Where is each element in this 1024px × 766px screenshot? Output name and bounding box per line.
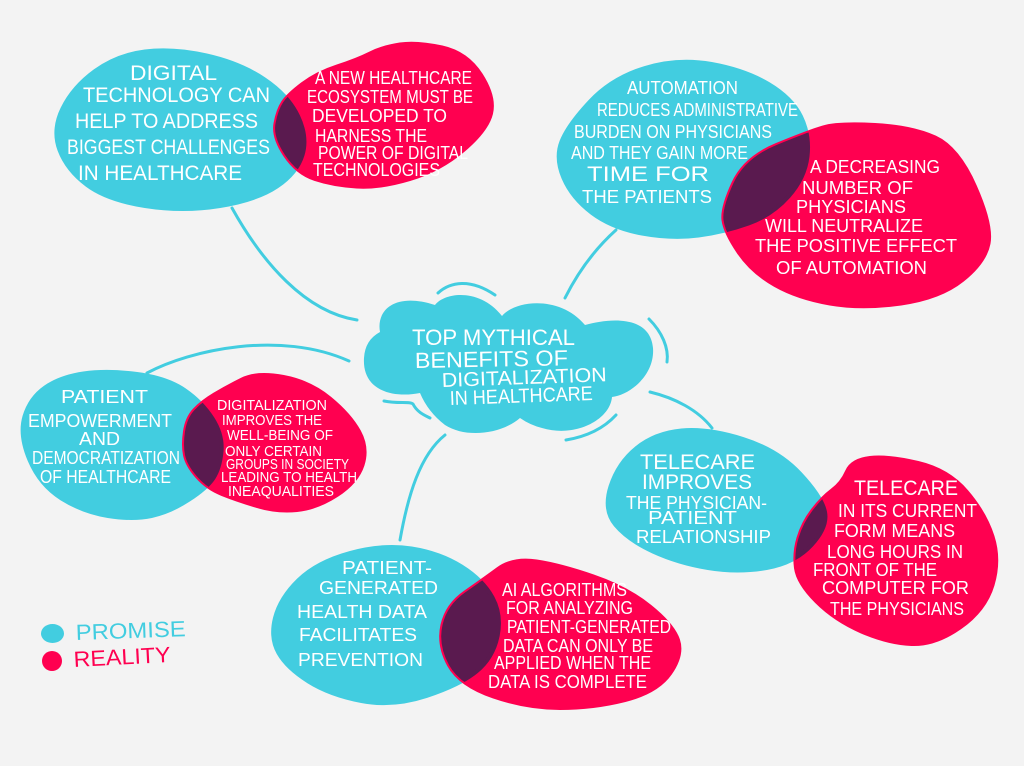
legend label: reality: REALITY bbox=[73, 642, 171, 672]
reality text: HARNESS THE bbox=[315, 126, 427, 146]
panel: central cloud title bbox=[364, 283, 667, 440]
reality text: AI ALGORITHMS bbox=[502, 580, 627, 600]
promise bubble bbox=[273, 547, 499, 703]
reality text: IN ITS CURRENT bbox=[838, 501, 977, 521]
panel: digital technology bbox=[56, 44, 492, 209]
promise text bbox=[571, 78, 798, 207]
reality text: INEAQUALITIES bbox=[228, 484, 334, 500]
legend swatch: promise bbox=[41, 624, 64, 643]
reality text: DATA CAN ONLY BE bbox=[503, 636, 653, 656]
promise text: IN HEALTHCARE bbox=[78, 162, 242, 185]
promise text: PREVENTION bbox=[298, 650, 423, 670]
overlap bbox=[795, 499, 828, 560]
connector: patient empowerment to center bbox=[147, 345, 349, 373]
promise text: PATIENT bbox=[648, 508, 737, 528]
promise text bbox=[67, 62, 270, 185]
reality bubble bbox=[275, 44, 492, 187]
reality text: PATIENT-GENERATED bbox=[507, 617, 671, 637]
reality text: ONLY CERTAIN bbox=[225, 444, 322, 460]
promise text: AND THEY GAIN MORE bbox=[571, 143, 748, 163]
title text: TOP MYTHICAL bbox=[412, 325, 575, 350]
reality text: DEVELOPED TO bbox=[312, 106, 447, 126]
promise text: RELATIONSHIP bbox=[636, 527, 771, 547]
title text: IN HEALTHCARE bbox=[449, 383, 593, 410]
reality text bbox=[307, 68, 473, 180]
reality text: A NEW HEALTHCARE bbox=[315, 68, 472, 88]
promise text: OF HEALTHCARE bbox=[40, 467, 171, 487]
promise text: BURDEN ON PHYSICIANS bbox=[574, 122, 772, 142]
promise bubble bbox=[559, 62, 808, 237]
overlap bbox=[275, 96, 306, 170]
connector: telecare to center bbox=[650, 392, 712, 428]
promise text: THE PATIENTS bbox=[582, 187, 712, 207]
promise text: REDUCES ADMINISTRATIVE bbox=[597, 100, 798, 120]
reality text: DIGITALIZATION bbox=[217, 398, 327, 414]
reality bubble bbox=[441, 561, 679, 708]
promise text bbox=[28, 387, 180, 487]
overlap bbox=[723, 132, 810, 232]
reality text: THE POSITIVE EFFECT bbox=[755, 236, 957, 256]
promise bubble bbox=[56, 50, 304, 209]
promise text: FACILITATES bbox=[299, 625, 417, 645]
promise text: PATIENT- bbox=[342, 558, 432, 578]
promise text: BIGGEST CHALLENGES bbox=[67, 136, 270, 159]
panel: patient empowerment bbox=[23, 372, 365, 518]
cloud accent strokes bbox=[384, 283, 667, 440]
reality text: LONG HOURS IN bbox=[827, 542, 963, 562]
reality bubble bbox=[184, 375, 365, 510]
promise text: PATIENT bbox=[61, 387, 148, 407]
promise text: IMPROVES bbox=[642, 471, 752, 494]
panel: patient-generated data bbox=[273, 547, 679, 708]
promise text: AND bbox=[79, 429, 120, 449]
promise text bbox=[626, 451, 771, 547]
connector: automation to center bbox=[565, 230, 616, 298]
promise text: DEMOCRATIZATION bbox=[32, 448, 180, 468]
reality text: PHYSICIANS bbox=[796, 197, 906, 217]
reality text: WELL-BEING OF bbox=[227, 428, 333, 444]
reality text: FOR ANALYZING bbox=[506, 598, 633, 618]
reality text: TECHNOLOGIES bbox=[313, 160, 440, 180]
promise text: EMPOWERMENT bbox=[28, 411, 172, 431]
reality text bbox=[755, 157, 957, 278]
overlap bbox=[184, 402, 224, 487]
promise text: GENERATED bbox=[319, 578, 438, 598]
reality text: GROUPS IN SOCIETY bbox=[226, 457, 349, 473]
reality bubble bbox=[723, 124, 989, 306]
legend swatch: reality bbox=[42, 651, 62, 671]
promise text bbox=[297, 558, 438, 670]
title text bbox=[412, 325, 607, 410]
cloud shape bbox=[364, 295, 653, 433]
reality text: TELECARE bbox=[854, 477, 958, 500]
reality text: A DECREASING bbox=[810, 157, 940, 177]
reality text: LEADING TO HEALTH bbox=[221, 470, 357, 486]
promise text: TIME FOR bbox=[587, 163, 709, 186]
connector: digital technology to center bbox=[232, 208, 357, 320]
reality text: FRONT OF THE bbox=[813, 560, 937, 580]
promise text: HEALTH DATA bbox=[297, 602, 427, 622]
reality text bbox=[488, 580, 671, 692]
panel: automation bbox=[559, 62, 989, 306]
reality text: ECOSYSTEM MUST BE bbox=[307, 87, 473, 107]
legend label: promise: PROMISE bbox=[75, 616, 186, 645]
reality text: APPLIED WHEN THE bbox=[494, 653, 651, 673]
reality bubble bbox=[795, 458, 996, 644]
connector: patient data to center bbox=[400, 435, 445, 540]
reality text: NUMBER OF bbox=[802, 178, 913, 198]
overlap bbox=[441, 580, 501, 682]
reality text: OF AUTOMATION bbox=[776, 258, 927, 278]
reality text: POWER OF DIGITAL bbox=[318, 143, 468, 163]
reality text bbox=[813, 477, 977, 619]
reality text bbox=[217, 398, 357, 500]
panel: telecare bbox=[608, 430, 996, 644]
title text: DIGITALIZATION bbox=[441, 364, 607, 392]
promise text: HELP TO ADDRESS bbox=[75, 110, 258, 133]
promise bubble bbox=[608, 430, 825, 570]
reality text: WILL NEUTRALIZE bbox=[765, 216, 923, 236]
reality text: DATA IS COMPLETE bbox=[488, 672, 647, 692]
reality text: COMPUTER FOR bbox=[822, 578, 969, 598]
legend bbox=[41, 616, 186, 672]
promise text: AUTOMATION bbox=[627, 78, 738, 98]
promise text: DIGITAL bbox=[130, 62, 217, 85]
promise text: THE PHYSICIAN- bbox=[626, 493, 767, 513]
reality text: THE PHYSICIANS bbox=[830, 599, 964, 619]
title text: BENEFITS OF bbox=[415, 345, 568, 373]
reality text: FORM MEANS bbox=[834, 521, 955, 541]
promise text: TECHNOLOGY CAN bbox=[83, 84, 270, 107]
promise bubble bbox=[23, 372, 222, 518]
promise text: TELECARE bbox=[640, 451, 755, 474]
reality text: IMPROVES THE bbox=[222, 413, 322, 429]
